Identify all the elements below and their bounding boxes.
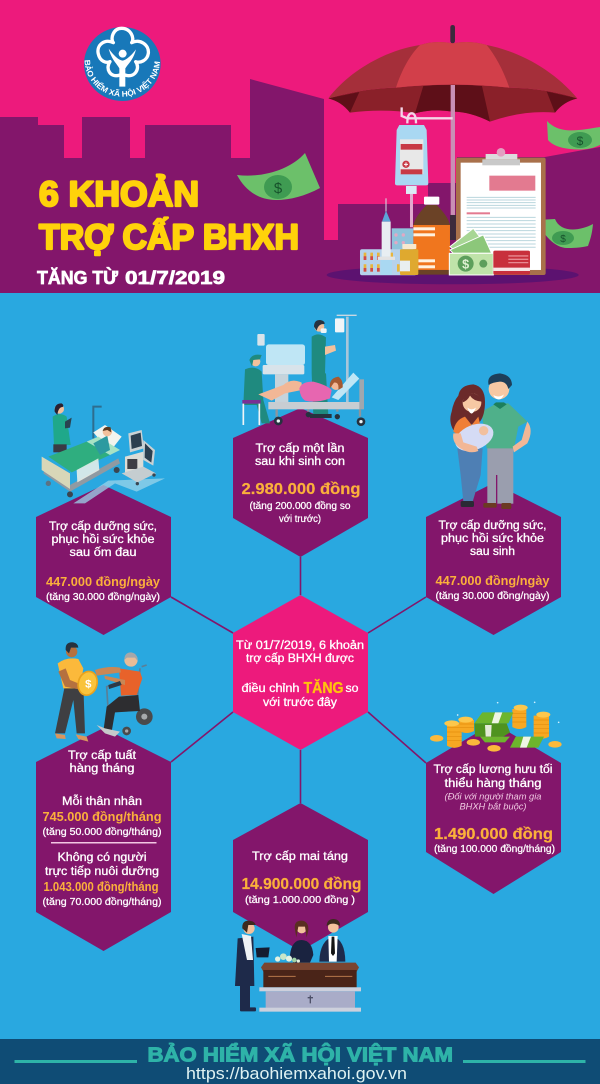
small yellow bottle (402, 244, 416, 249)
blister pack (360, 249, 417, 275)
increase note: (tăng 30.000 đồng/ngày) (436, 590, 550, 602)
panel: trợ cấp tuất hàng tháng (36, 728, 171, 951)
panel heading line 2: phục hồi sức khỏe (52, 534, 154, 546)
hexagon (233, 803, 368, 951)
amount: 1.490.000 đồng (434, 826, 553, 843)
subtitle date: 01/7/2019 (125, 268, 225, 288)
main blue background (0, 293, 600, 1039)
icon: falling banknote bottom right (537, 219, 593, 248)
summary line 3 end: so (346, 683, 358, 695)
umbrella pole (451, 85, 455, 217)
panel heading: Trợ cấp mai táng (252, 851, 348, 863)
panel heading: Trợ cấp tuất (68, 750, 137, 762)
increase note: (tăng 50.000 đồng/tháng) (42, 826, 162, 838)
panel heading line 2: sau khi sinh con (255, 456, 345, 468)
logo: BHXH Việt Nam: BẢO HIỂM XÃ HỘI VIỆT NAM (84, 60, 160, 98)
icon: falling banknote top right: $ (577, 134, 584, 148)
title (37, 174, 299, 288)
medicine bottle (424, 197, 439, 205)
umbrella canopy (328, 42, 577, 98)
hexagon (233, 408, 368, 557)
illustration: umbrella over medical items and paperwork (327, 25, 579, 284)
panel heading line 2: hàng tháng (70, 763, 134, 775)
pill pack back (392, 228, 413, 252)
illustration: wheelchair and benefit coin: $ (85, 679, 92, 691)
increase note: (tăng 100.000 đồng/tháng) (434, 843, 555, 855)
footer rule right (463, 1060, 586, 1063)
panel: dưỡng sức sau sinh (426, 483, 561, 635)
illustration: coins and banknotes (430, 701, 562, 752)
title line 1: 6 KHOẢN (39, 174, 199, 214)
panel heading: Trợ cấp lương hưu tối (434, 764, 552, 776)
scope note line 2: BHXH bắt buộc) (460, 802, 526, 812)
subtitle label: TĂNG TỪ (37, 267, 118, 288)
increase note: (tăng 30.000 đồng/ngày) (46, 591, 160, 603)
umbrella centre panel (396, 42, 509, 88)
sub heading 2 line 2: trực tiếp nuôi dưỡng (45, 866, 159, 878)
increase note: (tăng 200.000 đồng so (250, 500, 351, 512)
footer url: https://baohiemxahoi.gov.vn (186, 1064, 407, 1083)
umbrella tip (450, 25, 455, 43)
summary line 3 start: điều chỉnh (242, 683, 300, 695)
amount: 14.900.000 đồng (242, 876, 362, 893)
illustration: wheelchair and benefit coin (55, 642, 153, 742)
amount 2: 1.043.000 đồng/tháng (44, 880, 158, 894)
header skyline (0, 79, 600, 293)
title line 2: TRỢ CẤP BHXH (39, 217, 299, 257)
illustration: couple with baby (450, 373, 531, 509)
hexagon (426, 483, 561, 635)
panel: trợ cấp mai táng (233, 803, 368, 951)
icon: falling banknote left: $ (274, 180, 283, 197)
panel heading line 3: sau ốm đau (70, 547, 136, 559)
summary line 4: với trước đây (263, 697, 337, 709)
summary line 1: Từ 01/7/2019, 6 khoản (236, 640, 364, 652)
illustration: funeral scene (235, 919, 361, 1012)
sub heading: Mỗi thân nhân (62, 795, 142, 808)
illustration: hospital bed (42, 403, 165, 503)
panel: lương hưu tối thiểu (426, 723, 561, 894)
icon: falling banknote bottom right: $ (560, 234, 566, 245)
hexagon (233, 595, 368, 750)
hexagon (426, 723, 561, 894)
emphasised word: TĂNG (304, 678, 344, 697)
panel heading line 2: phục hồi sức khỏe (441, 533, 544, 545)
panel heading line 2: thiểu hàng tháng (444, 778, 542, 790)
footer organisation name: BẢO HIỂM XÃ HỘI VIỆT NAM (148, 1042, 453, 1066)
summary line 2: trợ cấp BHXH được (246, 653, 354, 665)
footer rule left (14, 1060, 137, 1063)
panel heading: Trợ cấp dưỡng sức, (438, 520, 546, 532)
footer background (0, 1039, 600, 1084)
IV hook (402, 107, 453, 123)
header background (0, 0, 600, 293)
red booklet (493, 251, 530, 275)
icon: falling banknote left (237, 153, 320, 200)
increase note: (tăng 1.000.000 đồng ) (245, 894, 355, 906)
logo: BHXH Việt Nam (84, 26, 161, 101)
hexagon (36, 485, 171, 635)
panel: dưỡng sức sau ốm đau (36, 485, 171, 635)
amount: 2.980.000 đồng (242, 481, 360, 498)
footer (0, 1039, 600, 1084)
amount: 745.000 đồng/tháng (42, 810, 162, 824)
increase note line 2: với trước) (279, 514, 321, 525)
hexagon (36, 728, 171, 951)
illustration: umbrella over medical items and paperwork: $ (462, 257, 469, 271)
panel: trợ cấp một lần sau sinh (233, 408, 368, 557)
panel heading: Trợ cấp dưỡng sức, (49, 521, 157, 533)
IV bag (395, 125, 428, 185)
divider (51, 842, 156, 844)
illustration: delivery room (242, 315, 365, 426)
amount: 447.000 đồng/ngày (436, 574, 550, 588)
amount: 447.000 đồng/ngày (46, 575, 160, 589)
umbrella underside (328, 85, 577, 122)
sub heading 2: Không có người (58, 852, 146, 864)
increase note 2: (tăng 70.000 đồng/tháng) (42, 896, 162, 908)
panel: centre summary (233, 595, 368, 750)
panel heading: Trợ cấp một lần (256, 443, 344, 455)
scope note: (Đối với người tham gia (444, 792, 542, 802)
connector lines (171, 557, 426, 803)
syringe (384, 198, 387, 213)
clipboard (456, 158, 546, 275)
icon: falling banknote top right (547, 121, 600, 150)
ground shadow (327, 266, 579, 284)
banknote stack (450, 228, 488, 255)
panel heading line 3: sau sinh (470, 546, 515, 558)
